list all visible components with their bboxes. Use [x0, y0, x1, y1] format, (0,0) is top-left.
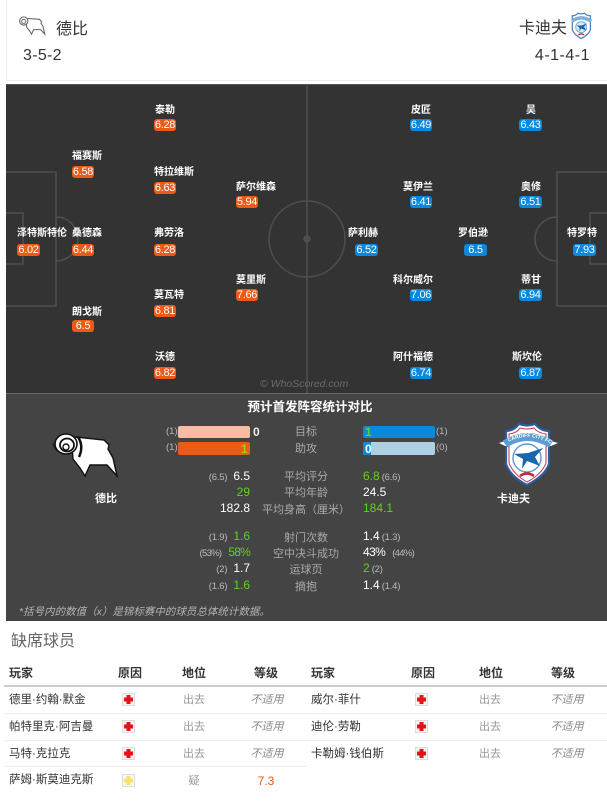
home tackles value: (1.6) 1.6 [209, 578, 250, 592]
icon: Cardiff crest: CARDIFF CITY FC [508, 433, 552, 444]
player: 罗伯逊: 罗伯逊 [458, 228, 488, 238]
player: 泽特斯特伦: 泽特斯特伦 [17, 228, 67, 238]
player: 斯坎伦: 斯坎伦 [512, 352, 542, 362]
player: 桑德森: 桑德森 [72, 228, 102, 238]
player: 特罗特: 7.93 [574, 244, 595, 256]
player: 特拉维斯: 6.63 [155, 182, 175, 194]
player: 泰勒: 泰勒 [155, 104, 175, 116]
player: 吴: 吴 [526, 104, 536, 116]
player: 福赛斯: 福赛斯 [72, 150, 102, 162]
icon: Derby ram small crest [19, 16, 46, 36]
rating: 不适用 [550, 694, 584, 706]
stat label: shots: 射门次数 [284, 532, 328, 544]
stat label: goals: 目标 [295, 426, 317, 438]
goals row: home bar: (1) [166, 426, 178, 437]
player: 莫瓦特 [154, 289, 184, 317]
player: 莫伊兰: 6.41 [411, 196, 431, 208]
player: 莫里斯: 莫里斯 [236, 274, 266, 286]
table header: right: 玩家 [311, 666, 335, 680]
watermark: © WhoScored.com [260, 378, 348, 390]
player: 罗伯逊: 6.5 [468, 244, 483, 256]
player: 桑德森 [72, 227, 102, 256]
home team label: 德比 [95, 493, 117, 505]
row: 威尔·菲什: 威尔·菲什 [311, 694, 361, 706]
rating: 不适用 [550, 721, 584, 733]
icon: Cardiff small crest [571, 12, 592, 39]
player: 泰勒: 6.28 [155, 119, 175, 131]
row: 卡勒姆·钱伯斯: 卡勒姆·钱伯斯 [311, 748, 384, 760]
away dribbles value: 2(2) [363, 561, 383, 575]
footnote: *括号内的数值（x）是锦标赛中的球员总体统计数据。 [19, 606, 270, 618]
player: 斯坎伦: 6.87 [520, 367, 541, 379]
player: 沃德 [154, 351, 176, 379]
player: 沃德: 沃德 [155, 352, 175, 362]
player: 萨尔维森: 5.94 [237, 196, 257, 208]
player: 皮匠 [410, 104, 432, 131]
player: 福赛斯: 6.58 [73, 166, 93, 178]
player: 弗劳洛: 6.28 [155, 244, 175, 256]
player: 萨利赫: 6.52 [356, 244, 377, 256]
home formation: 3-5-2 [23, 47, 62, 64]
player: 皮匠: 皮匠 [411, 104, 431, 116]
goals row: away bar [363, 425, 448, 439]
player: 吴 [519, 104, 542, 131]
header panel: teams and formations [6, 0, 607, 81]
home dribbles value: (2) 1.7 [216, 561, 250, 575]
row: 萨姆·斯莫迪克斯: 萨姆·斯莫迪克斯 [9, 774, 93, 786]
row: 帕特里克·阿吉曼: 帕特里克·阿吉曼 [9, 721, 93, 733]
goals row: away bar: 1 [365, 425, 372, 439]
stat label: assists: 助攻 [295, 443, 317, 455]
icon: injury [415, 693, 428, 706]
table header: left: 原因 [118, 666, 142, 680]
status: 出去 [479, 748, 501, 760]
player: 弗劳洛 [154, 227, 184, 256]
assists row: home bar: 1 [241, 442, 248, 456]
home height value: 182.8 [220, 501, 250, 515]
table header: right: 等级 [551, 666, 575, 680]
row: 德里·约翰·默金: 德里·约翰·默金 [9, 694, 86, 706]
stat label: average height: 平均身高（厘米） [262, 504, 350, 516]
icon: doubtful [122, 774, 135, 787]
assists row: home bar [166, 442, 250, 456]
icon: injury [415, 747, 428, 760]
player: 科尔威尔: 科尔威尔 [393, 274, 433, 286]
icon: injury [122, 747, 135, 760]
home age value: 29 [237, 485, 250, 499]
table header: left: 地位 [182, 666, 206, 680]
status: 出去 [183, 694, 205, 706]
player: 阿什福德 [393, 351, 433, 379]
player: 莫瓦特: 莫瓦特 [154, 290, 184, 300]
rating: 不适用 [250, 721, 284, 733]
icon: injury [122, 720, 135, 733]
player: 皮匠: 6.49 [411, 119, 431, 131]
player: 朗戈斯 [72, 306, 102, 332]
away team label: 卡迪夫 [497, 493, 530, 505]
away age value: 24.5 [363, 485, 386, 499]
player: 弗劳洛: 弗劳洛 [154, 228, 184, 238]
player: 沃德: 6.82 [155, 367, 175, 379]
panel: lineup statistics comparison [6, 394, 607, 621]
goals row: home bar: 0 [253, 425, 260, 439]
player: 泽特斯特伦 [17, 227, 67, 256]
player: 科尔威尔: 7.06 [411, 289, 431, 301]
goals row: away bar: (1) [436, 426, 448, 437]
table header: left: 等级 [254, 666, 278, 680]
assists row: home bar: (1) [166, 442, 178, 453]
player: 福赛斯 [72, 150, 102, 178]
player: 朗戈斯: 朗戈斯 [72, 306, 102, 318]
assists row: away bar: 0 [365, 442, 372, 456]
player: 莫伊兰: 莫伊兰 [403, 182, 433, 192]
player: 奥修 [519, 181, 542, 208]
table header: right: 地位 [479, 666, 503, 680]
player: 泰勒 [154, 104, 176, 131]
status: 出去 [183, 721, 205, 733]
player: 萨尔维森 [236, 181, 276, 208]
table header: right: 原因 [411, 666, 435, 680]
icon: Cardiff crest [499, 422, 558, 486]
status: 出去 [183, 748, 205, 760]
rating: 7.3 [258, 774, 274, 788]
status: 疑 [188, 775, 200, 787]
player: 莫伊兰 [403, 181, 433, 208]
player: 特罗特: 特罗特 [567, 228, 597, 238]
player: 萨利赫: 萨利赫 [348, 228, 378, 238]
player: 奥修: 6.51 [520, 196, 541, 208]
assists row: away bar [363, 442, 448, 456]
home shots value: (1.9) 1.6 [209, 529, 250, 543]
player: 蒂甘 [519, 274, 542, 301]
icon: Derby ram crest [52, 433, 118, 478]
stat label: tackles: 摘抱 [295, 581, 317, 593]
away tackles value: 1.4(1.4) [363, 578, 400, 592]
missing players heading: 缺席球员 [11, 633, 75, 650]
goals row: home bar [166, 425, 260, 439]
away rating value: 6.8(6.6) [363, 469, 400, 483]
player: 特拉维斯 [154, 166, 194, 194]
player: 莫里斯: 7.66 [237, 289, 257, 301]
icon: injury [415, 720, 428, 733]
player: 萨尔维森: 萨尔维森 [236, 182, 276, 192]
away formation: 4-1-4-1 [535, 47, 590, 64]
player: 莫里斯 [236, 274, 266, 301]
player: 朗戈斯: 6.5 [76, 320, 90, 332]
away height value: 184.1 [363, 501, 393, 515]
player: 特罗特 [567, 227, 597, 256]
player: 蒂甘: 6.94 [520, 289, 541, 301]
away shots value: 1.4(1.3) [363, 529, 400, 543]
player: 特拉维斯: 特拉维斯 [154, 166, 194, 178]
player: 阿什福德: 阿什福德 [393, 352, 433, 362]
icon: injury [122, 693, 135, 706]
player: 萨利赫 [348, 227, 378, 256]
away aerial value: 43% (44%) [363, 545, 414, 559]
stat label: average age: 平均年龄 [284, 487, 328, 499]
player: 科尔威尔 [393, 274, 433, 301]
player: 泽特斯特伦: 6.02 [18, 244, 39, 256]
stat label: aerial duels: 空中决斗成功 [273, 548, 339, 560]
rating: 不适用 [250, 748, 284, 760]
stat label: dribbles: 运球页 [290, 564, 322, 576]
home team name: 德比 [56, 21, 88, 38]
panel: missing players [0, 621, 607, 804]
panel: pitch lineup [6, 84, 607, 394]
player: 莫瓦特: 6.81 [155, 305, 175, 317]
home rating value: (6.5) 6.5 [209, 469, 250, 483]
row: 马特·克拉克: 马特·克拉克 [9, 748, 70, 760]
stats title: 预计首发阵容统计对比 [247, 400, 372, 414]
player: 蒂甘: 蒂甘 [521, 274, 541, 286]
table header: right [311, 666, 581, 680]
player: 吴: 6.43 [520, 119, 541, 131]
row: 迪伦·劳勒: 迪伦·劳勒 [311, 721, 361, 733]
player: 罗伯逊 [458, 227, 488, 256]
table header: left: 玩家 [9, 666, 33, 680]
player: 桑德森: 6.44 [73, 244, 93, 256]
player: 阿什福德: 6.74 [411, 367, 431, 379]
rating: 不适用 [550, 748, 584, 760]
pitch markings [6, 85, 607, 393]
status: 出去 [479, 721, 501, 733]
player: 奥修: 奥修 [521, 182, 541, 192]
rating: 不适用 [250, 694, 284, 706]
away team name: 卡迪夫 [519, 20, 567, 37]
table header: left [9, 666, 289, 680]
home aerial value: (53%) 58% [200, 545, 250, 559]
status: 出去 [479, 694, 501, 706]
stat label: average rating: 平均评分 [284, 471, 328, 483]
player: 斯坎伦 [512, 351, 542, 379]
assists row: away bar: (0) [436, 442, 448, 453]
